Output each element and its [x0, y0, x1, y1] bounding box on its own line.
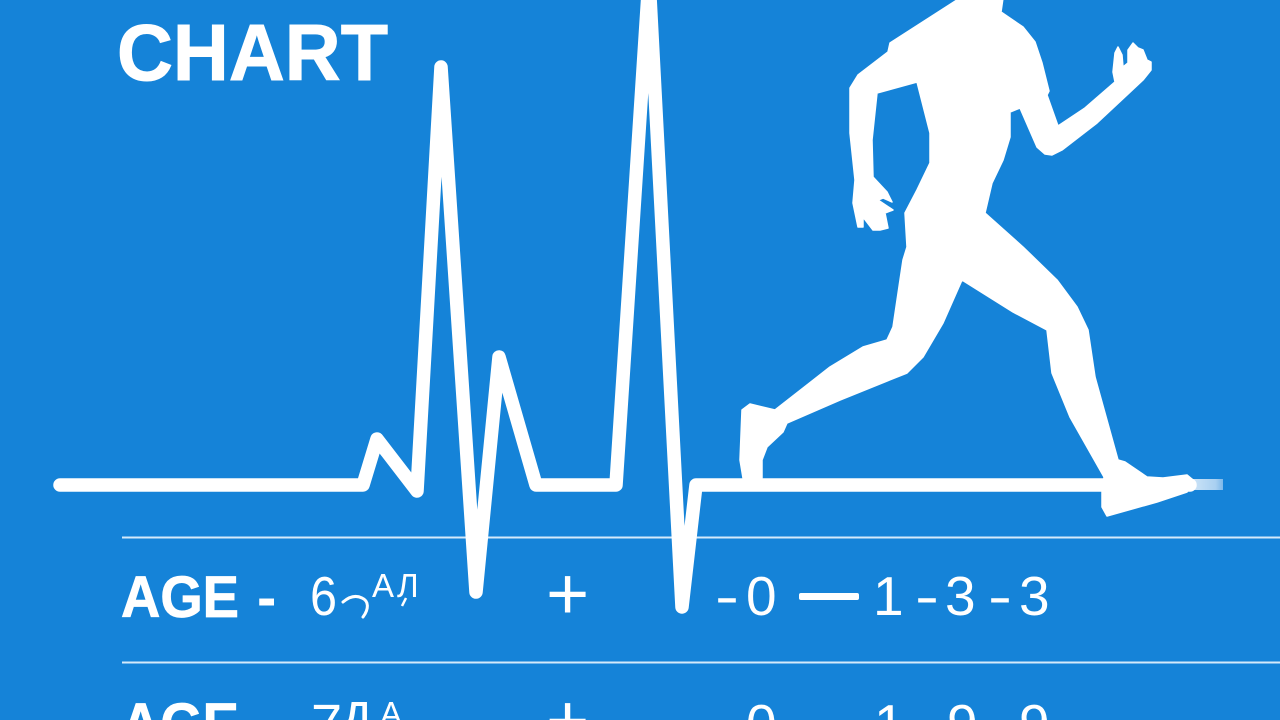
- table row: age 6: -: [915, 565, 939, 627]
- heartbeat line: [60, 0, 1223, 607]
- table row: age 6: 3: [945, 565, 976, 627]
- table row: age 6: A: [372, 567, 394, 604]
- title: CHART: [117, 8, 388, 97]
- icon: running person: [740, 0, 1193, 516]
- table row: age 6: [121, 552, 1050, 635]
- table row: age 6: 0: [746, 565, 777, 627]
- table row: age 6: -: [257, 565, 276, 630]
- table row: age 7: [121, 679, 1050, 720]
- table row: age 6: 6: [310, 565, 337, 627]
- table row: age 6: AGE: [121, 565, 239, 630]
- divider lines: [122, 538, 1280, 662]
- table row: age 6: +: [546, 552, 589, 635]
- table row: age 6: -: [715, 565, 739, 627]
- table row: age 6: 3: [1019, 565, 1050, 627]
- table row: age 6: Л: [397, 567, 419, 604]
- table row: age 6: 1: [873, 565, 904, 627]
- table row: age 6: -: [988, 565, 1012, 627]
